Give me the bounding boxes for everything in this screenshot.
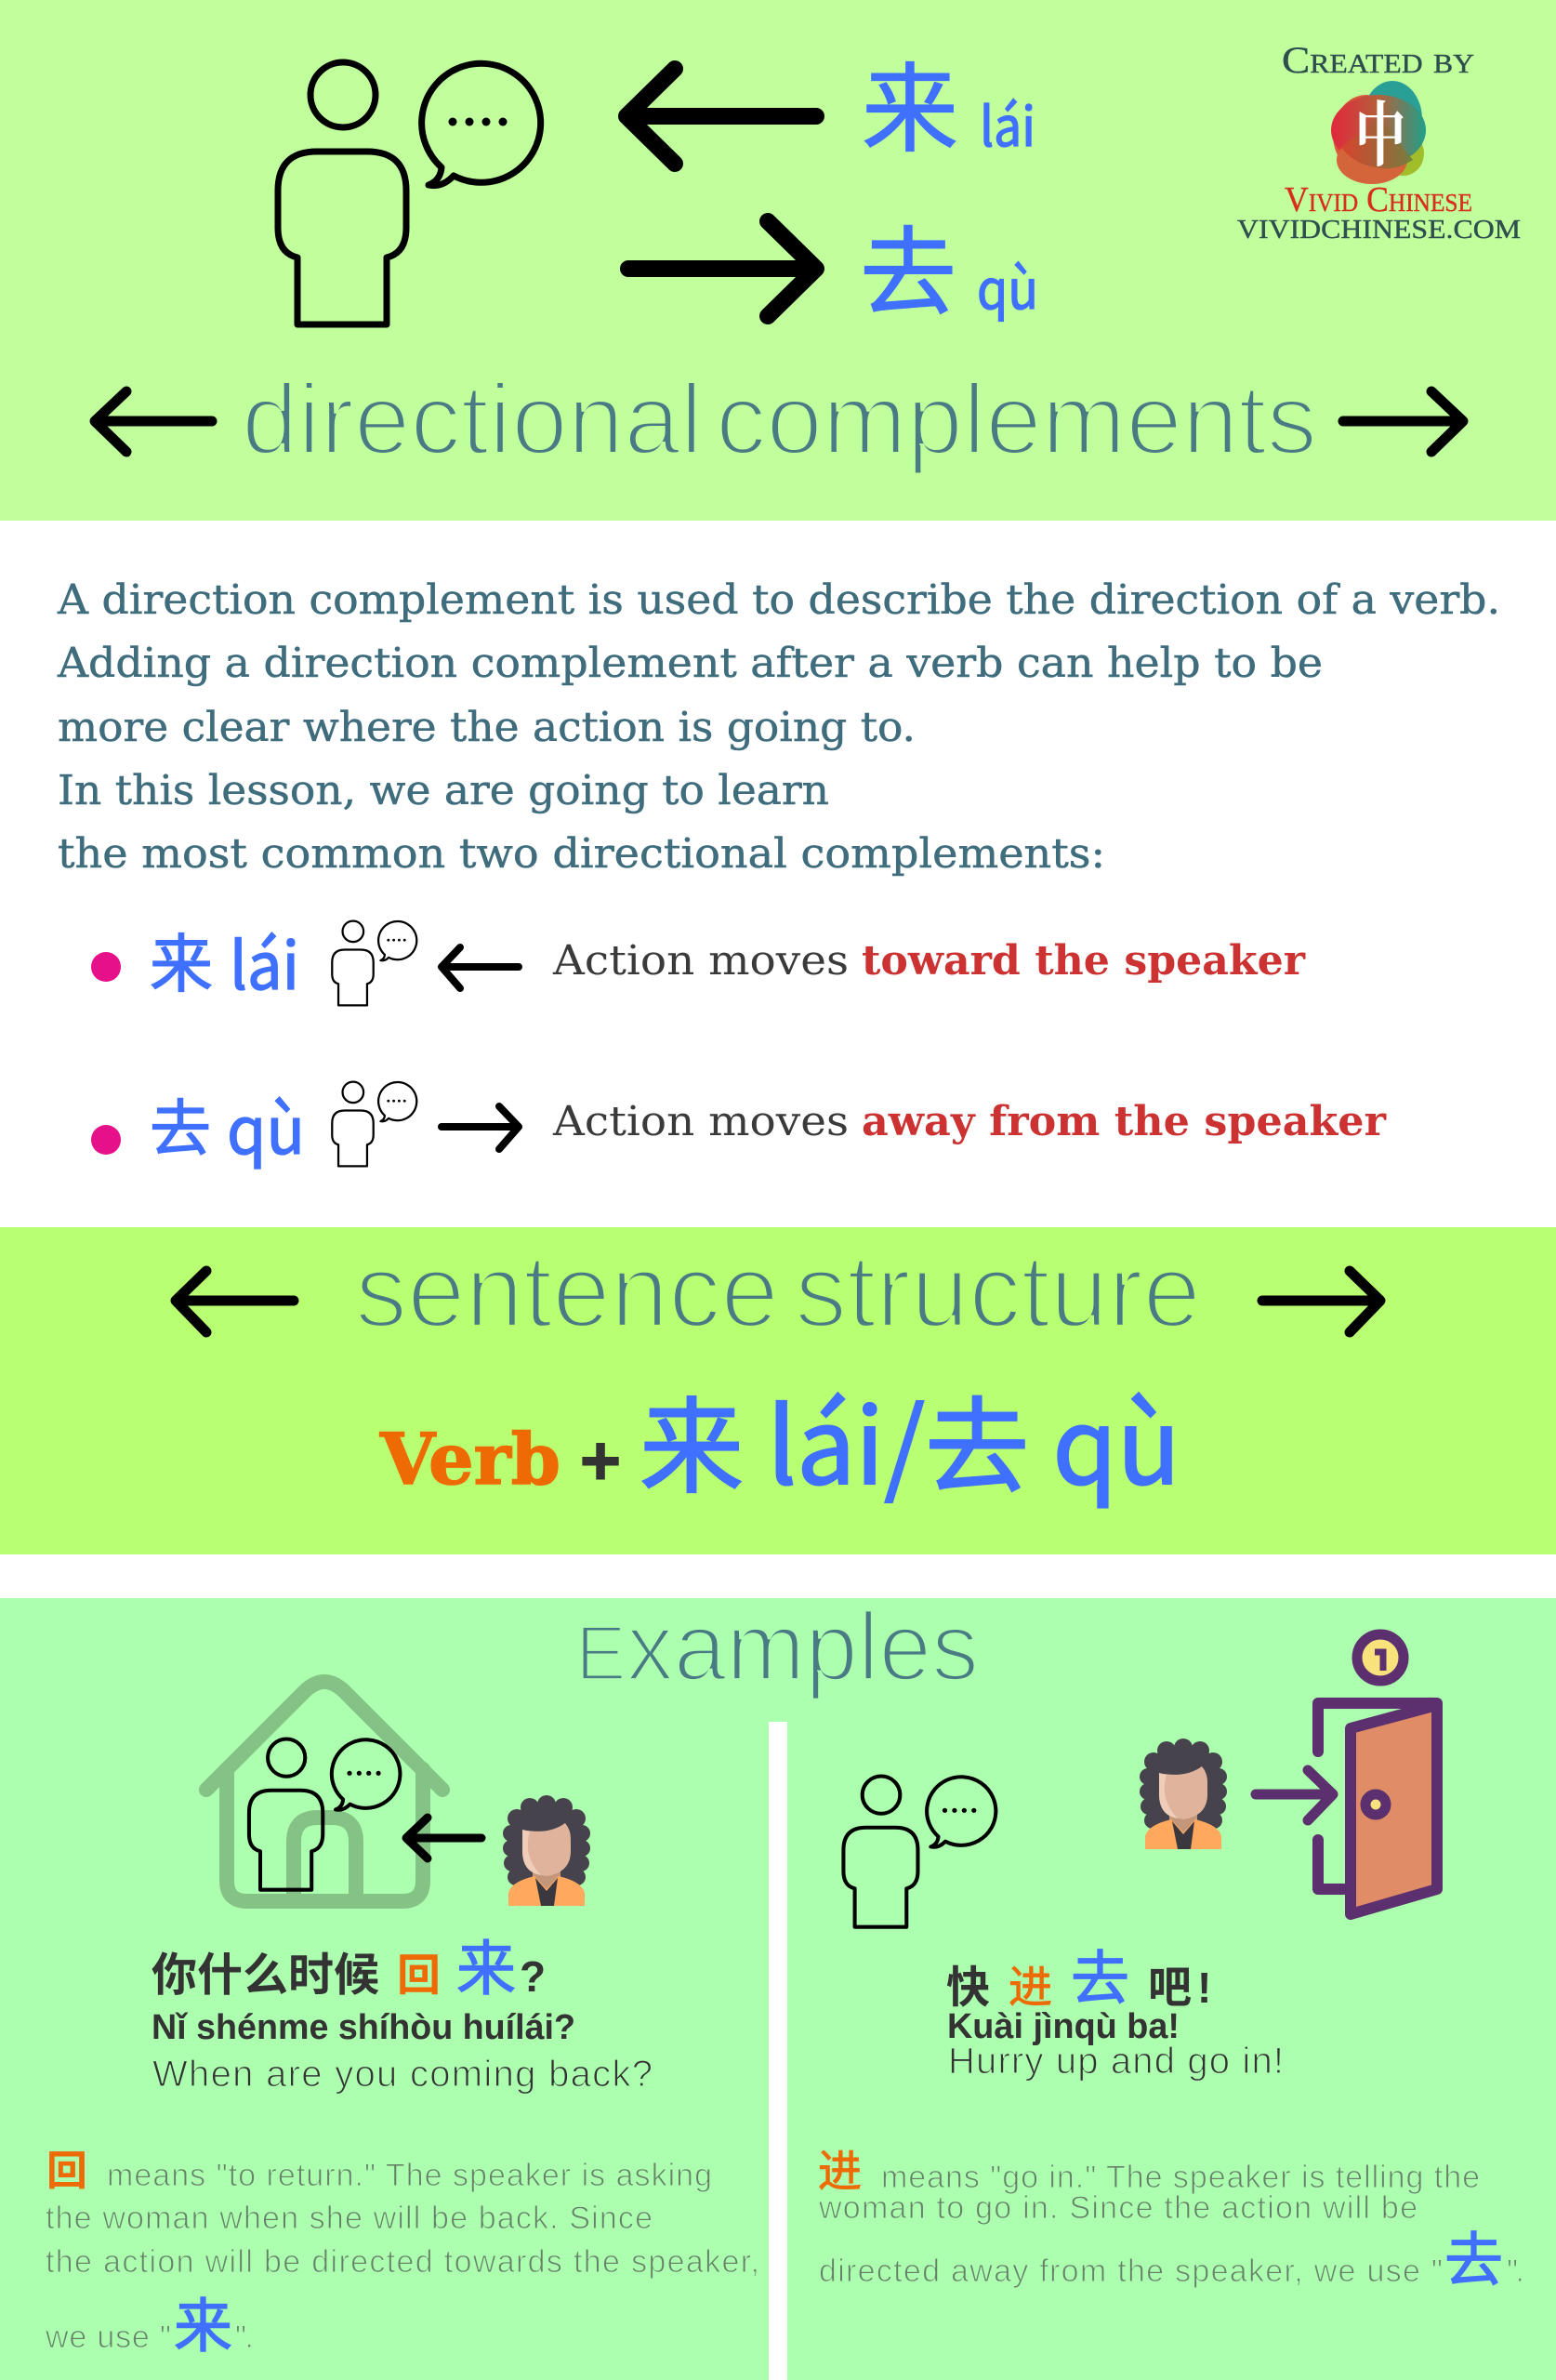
formula: verb plus lai or qu: Verb xyxy=(379,1418,560,1501)
example 1 sentence xyxy=(152,1922,653,2095)
text block: introduction: more clear where the action is going to. xyxy=(58,704,916,751)
example 2 sentence: ! xyxy=(1197,1964,1211,2012)
icon: key circle xyxy=(1357,1634,1404,1681)
label: lai xyxy=(862,31,1035,171)
arrow: heading left xyxy=(95,391,212,452)
heading: directional complements: directional complements xyxy=(242,363,1317,475)
arrow: heading right xyxy=(1343,391,1463,452)
example 1 explanation xyxy=(45,2137,759,2364)
example 1 sentence: 回 xyxy=(397,1939,441,2003)
text: toward the speaker: Action moves xyxy=(552,937,849,985)
label: qu xyxy=(150,1079,305,1173)
example 1 illustration xyxy=(206,1682,590,1906)
example 2 explanation: 进 xyxy=(818,2135,862,2200)
icon: speaker with speech bubble xyxy=(278,62,541,324)
heading: examples: Examples xyxy=(575,1593,979,1701)
text: away from the speaker: Action moves xyxy=(552,1098,849,1145)
example 1 sentence: 你什么时候 xyxy=(152,1938,379,2004)
arrow: small left xyxy=(442,947,519,988)
example 1 sentence: ? xyxy=(520,1952,546,2001)
formula: verb plus lai or qu: + xyxy=(578,1428,623,1491)
logo: created by Vivid Chinese: VIVIDCHINESE.COM xyxy=(1237,216,1521,245)
bullet xyxy=(91,1125,121,1155)
example 2 illustration xyxy=(843,1634,1437,1927)
label: lai: lái xyxy=(230,915,299,1009)
example 2 sentence: 进 xyxy=(1009,1951,1052,2016)
arrow: sentence left xyxy=(176,1271,294,1332)
formula: verb plus lai or qu xyxy=(379,1364,1180,1514)
example 2 explanation xyxy=(818,2135,1524,2298)
arrow: small right xyxy=(442,1106,519,1149)
example 2 explanation: directed away from the speaker, we use " xyxy=(819,2254,1443,2289)
icon: woman xyxy=(503,1795,590,1906)
example 1 explanation: means "to return." The speaker is asking xyxy=(107,2158,712,2193)
example 1 sentence: Nǐ shénme shíhòu huílái? xyxy=(152,2008,575,2047)
example 2 explanation: ". xyxy=(1507,2254,1524,2289)
arrow: toward house xyxy=(406,1818,481,1858)
example 2 explanation: means "go in." The speaker is telling the xyxy=(881,2160,1480,2195)
icon: speaker xyxy=(249,1739,400,1890)
white column divider xyxy=(769,1722,787,2380)
text: away from the speaker: away from the speaker xyxy=(862,1098,1387,1145)
text block: introduction: A direction complement is used to describe the direction of a verb. xyxy=(57,576,1500,624)
logo: created by Vivid Chinese: Created by xyxy=(1282,39,1474,81)
icon: door xyxy=(1318,1703,1437,1914)
bullet xyxy=(91,952,121,982)
label: lai: 来 xyxy=(150,913,213,1005)
formula: verb plus lai or qu: 来 lái/去 qù xyxy=(640,1364,1180,1514)
example 2 sentence: Kuài jìnqù ba! xyxy=(947,2007,1180,2046)
text block: introduction: In this lesson, we are going to learn xyxy=(58,767,829,814)
example 2 sentence xyxy=(946,1932,1284,2082)
logo: created by Vivid Chinese xyxy=(1237,39,1521,245)
row: lai moves toward speaker xyxy=(91,913,1306,1009)
explanation panel background xyxy=(0,521,1556,1227)
icon: woman xyxy=(1140,1739,1227,1849)
example 2 sentence: 快 xyxy=(946,1951,990,2016)
label: qu: qù xyxy=(227,1079,305,1173)
example 1 sentence: When are you coming back? xyxy=(152,2054,653,2095)
arrow: into door xyxy=(1256,1770,1333,1820)
label: qu: 去 xyxy=(860,194,956,335)
example 1 explanation: we use " xyxy=(45,2320,171,2355)
label: lai: lái xyxy=(980,84,1035,162)
example 2 explanation: woman to go in. Since the action will be xyxy=(818,2190,1418,2226)
sentence structure panel background xyxy=(0,1227,1556,1554)
arrow: sentence right xyxy=(1262,1271,1380,1332)
example 2 explanation: 去 xyxy=(1444,2214,1503,2298)
row: qu moves away from speaker xyxy=(91,1079,1387,1173)
label: qu: 去 xyxy=(150,1079,211,1169)
label: lai: 来 xyxy=(862,31,958,171)
label: qu xyxy=(860,194,1038,335)
top banner background xyxy=(0,0,1556,521)
icon: small speaker xyxy=(332,921,416,1005)
heading: sentence structure: sentence structure xyxy=(355,1233,1201,1349)
arrow: away from speaker xyxy=(628,221,816,316)
example 2 sentence: Hurry up and go in! xyxy=(948,2041,1284,2082)
example 1 explanation: 来 xyxy=(174,2280,232,2364)
example 2 sentence: 吧 xyxy=(1148,1951,1192,2016)
example 2 sentence: 去 xyxy=(1071,1932,1129,2016)
example 1 explanation: ". xyxy=(235,2320,254,2355)
icon: house xyxy=(206,1682,442,1901)
text block: introduction: Adding a direction complement after a verb can help to be xyxy=(57,640,1323,687)
label: lai xyxy=(150,913,299,1009)
example 1 explanation: the woman when she will be back. Since xyxy=(46,2201,653,2236)
text block: introduction: the most common two directional complements: xyxy=(58,830,1105,878)
logo: created by Vivid Chinese: Vivid Chinese xyxy=(1285,180,1472,219)
icon: small speaker xyxy=(332,1082,416,1166)
icon: speaker xyxy=(843,1777,996,1927)
label: qu: qù xyxy=(977,246,1038,324)
text: toward the speaker: toward the speaker xyxy=(862,937,1306,985)
text: away from the speaker xyxy=(552,1098,1387,1145)
text block: introduction xyxy=(57,576,1500,878)
examples panel background xyxy=(0,1598,1556,2380)
example 1 sentence: 来 xyxy=(456,1922,516,2007)
example 1 explanation: 回 xyxy=(46,2137,87,2197)
example 1 explanation: the action will be directed towards the speaker, xyxy=(46,2244,759,2280)
arrow: toward speaker xyxy=(626,69,816,164)
logo: created by Vivid Chinese: 中 xyxy=(1355,79,1405,180)
text: toward the speaker xyxy=(552,937,1306,985)
